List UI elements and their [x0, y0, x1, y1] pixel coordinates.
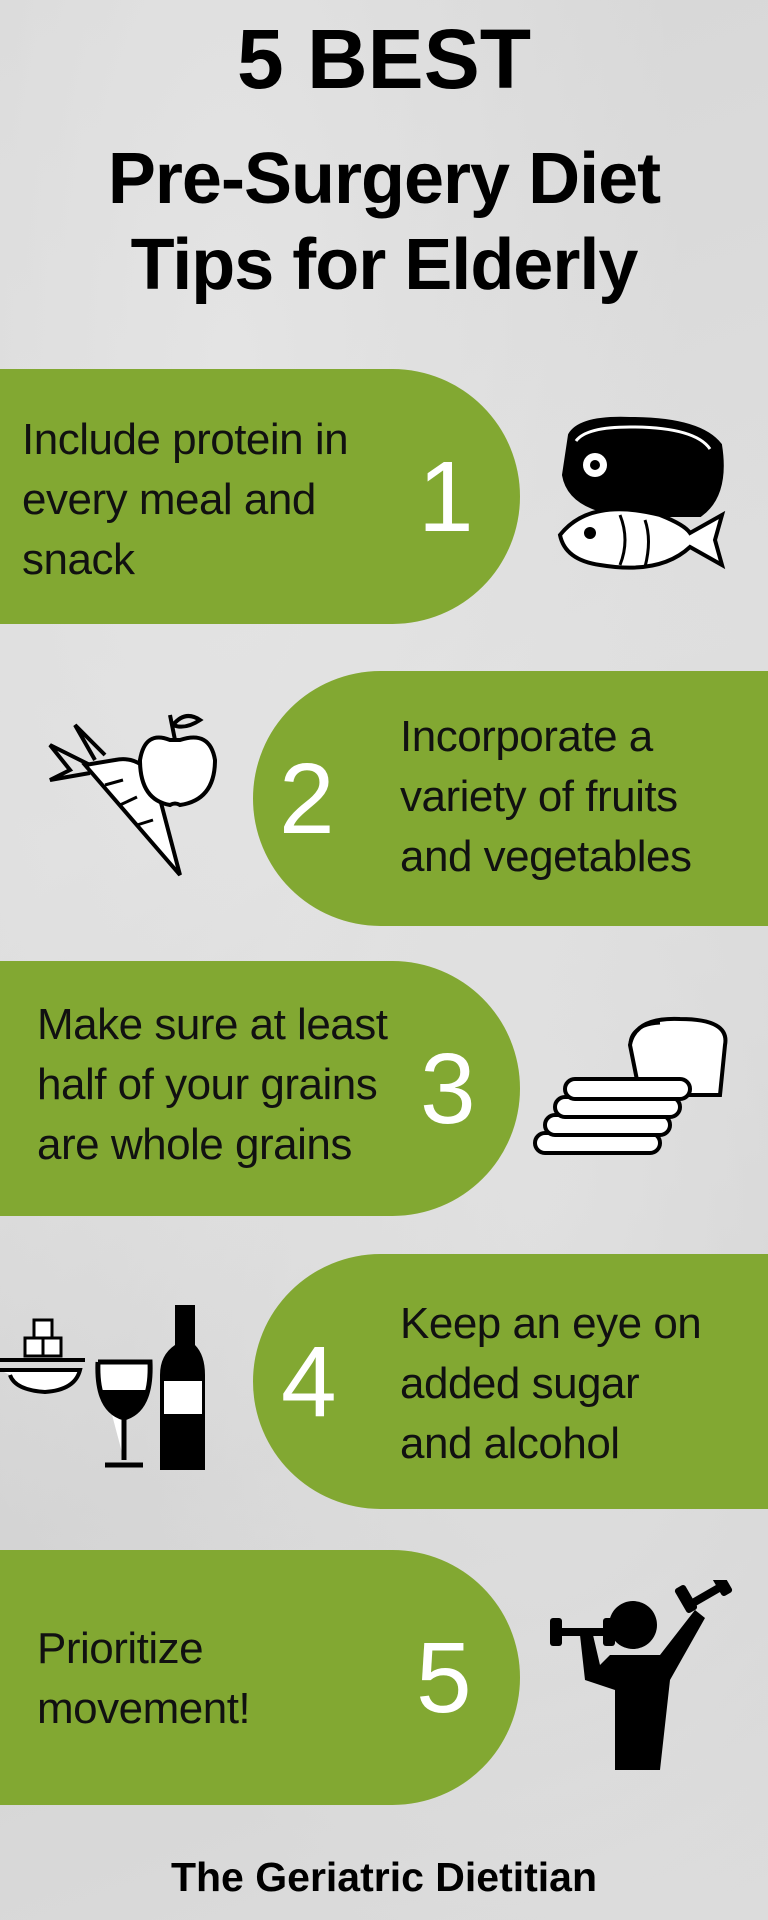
text: tip 1: snack [22, 535, 134, 584]
number 1: 1 [418, 441, 474, 553]
text: tip 5: Prioritize [37, 1624, 203, 1673]
panel: tip 4 [253, 1254, 768, 1509]
text: tip 1: every meal and [22, 475, 316, 524]
title [108, 12, 660, 305]
text: tip 2 [400, 712, 691, 881]
text: tip 2: Incorporate a [400, 712, 653, 761]
text: tip 4: added sugar [400, 1359, 639, 1408]
panel: tip 3 [0, 961, 520, 1216]
title: Pre-Surgery Diet [108, 139, 660, 219]
text: tip 3: are whole grains [37, 1120, 352, 1169]
text: tip 2: variety of fruits [400, 772, 678, 821]
panel: tip 1 [0, 369, 520, 624]
panel: tip 5 [0, 1550, 520, 1805]
text: tip 2: and vegetables [400, 832, 691, 881]
number 3: 3 [420, 1033, 476, 1145]
text: tip 3: half of your grains [37, 1060, 377, 1109]
icon: carrot and apple [48, 714, 217, 876]
text: tip 4 [400, 1299, 701, 1468]
footer: brand: The Geriatric Dietitian [171, 1854, 597, 1900]
text: tip 3 [37, 1000, 388, 1169]
text: tip 3: Make sure at least [37, 1000, 388, 1049]
icon: meat and fish [558, 416, 726, 570]
icon: sugar, wine, bottle [0, 1305, 205, 1470]
number 5: 5 [416, 1622, 472, 1734]
text: tip 1 [22, 415, 348, 584]
number 4: 4 [281, 1326, 337, 1438]
text: tip 4: and alcohol [400, 1419, 620, 1468]
title: 5 BEST [237, 12, 531, 106]
text: tip 4: Keep an eye on [400, 1299, 701, 1348]
text: tip 5: movement! [37, 1684, 250, 1733]
icon: person lifting weights [550, 1580, 732, 1770]
text: tip 5 [37, 1624, 250, 1733]
panel: tip 2 [253, 671, 768, 926]
text: tip 1: Include protein in [22, 415, 348, 464]
number 2: 2 [279, 743, 335, 855]
icon: bread [533, 1016, 728, 1155]
title: Tips for Elderly [131, 225, 637, 305]
